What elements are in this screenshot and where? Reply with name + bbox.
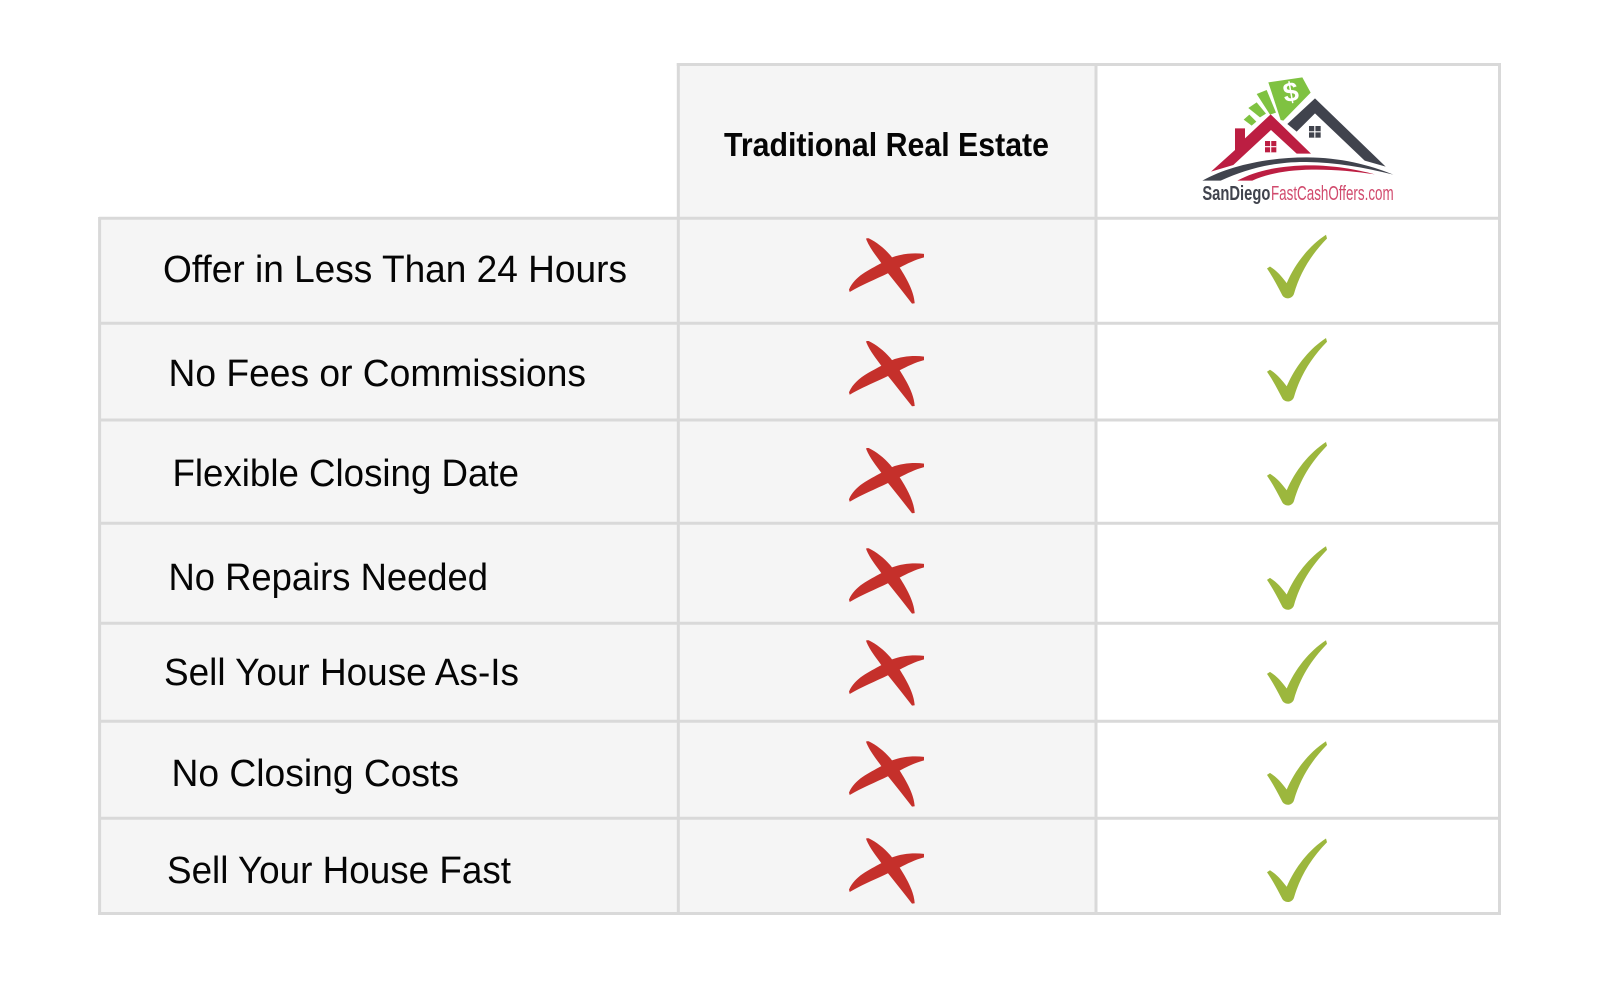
row label: Sell Your House As-Is: Sell Your House As-Is <box>164 652 519 694</box>
icon: red cross, row 3 <box>849 448 924 513</box>
icon: road swooshes <box>1202 157 1393 181</box>
icon: red cross, row 5 <box>849 640 924 706</box>
row label: No Fees or Commissions: No Fees or Commissions <box>168 353 586 395</box>
icon: red cross, row 6 <box>849 741 924 807</box>
row label: Offer in Less Than 24 Hours: Offer in Less Than 24 Hours <box>163 249 627 291</box>
icon: green check, row 7 <box>1267 838 1327 902</box>
row label: Sell Your House Fast: Sell Your House Fast <box>167 850 511 892</box>
icon: red cross, row 7 <box>849 838 924 904</box>
row label: Flexible Closing Date: Flexible Closing Date <box>172 453 519 495</box>
logo wordmark <box>1202 182 1394 205</box>
logo wordmark: FastCashOffers.com <box>1271 182 1394 205</box>
icon: green check, row 2 <box>1267 338 1327 402</box>
icon: green check, row 5 <box>1267 640 1327 704</box>
heading: Traditional Real Estate: Traditional Real Estate <box>724 126 1049 163</box>
logo: SanDiegoFastCashOffers.com <box>1202 75 1394 205</box>
icon: dark house roof <box>1287 98 1386 167</box>
icon: red cross, row 4 <box>849 548 924 614</box>
logo wordmark: SanDiego <box>1202 182 1270 205</box>
row label: No Repairs Needed: No Repairs Needed <box>168 557 488 599</box>
icon: red cross, row 1 <box>849 238 924 304</box>
icon: red house roof <box>1211 114 1311 172</box>
icon: green check, row 4 <box>1267 546 1327 610</box>
icon: green cash bills: $ <box>1281 75 1301 108</box>
row label: No Closing Costs: No Closing Costs <box>172 753 459 795</box>
icon: green check, row 6 <box>1267 741 1327 805</box>
icon: green check, row 1 <box>1267 235 1327 298</box>
icon: red cross, row 2 <box>849 341 924 406</box>
icon: green check, row 3 <box>1267 442 1327 506</box>
icon: green cash bills <box>1244 75 1311 126</box>
